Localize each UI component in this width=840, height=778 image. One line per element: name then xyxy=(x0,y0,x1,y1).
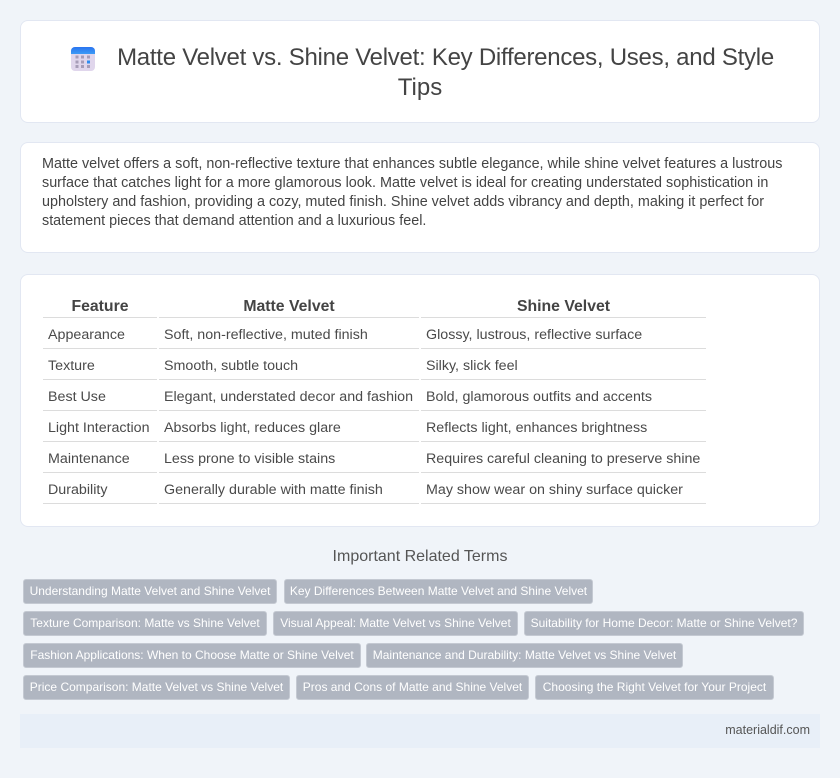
heading: Matte Velvet vs. Shine Velvet: Key Differences, Uses, and Style xyxy=(117,44,774,71)
related term tags: Fashion Applications: When to Choose Matte or Shine Velvet xyxy=(30,648,354,662)
related term tags: Visual Appeal: Matte Velvet vs Shine Velvet xyxy=(280,616,511,630)
comparison table: Requires careful cleaning to preserve shine xyxy=(426,451,700,467)
comparison table: Maintenance xyxy=(48,451,130,467)
comparison table: Less prone to visible stains xyxy=(164,451,335,467)
comparison table: Soft, non-reflective, muted finish xyxy=(164,327,368,343)
related term tags: Understanding Matte Velvet and Shine Velvet xyxy=(30,584,270,598)
related term tags: Pros and Cons of Matte and Shine Velvet xyxy=(303,680,522,694)
related term tags: Choosing the Right Velvet for Your Project xyxy=(543,680,766,694)
comparison table: Elegant, understated decor and fashion xyxy=(164,389,413,405)
comparison table: Reflects light, enhances brightness xyxy=(426,420,647,436)
text block: introduction: upholstery and fashion, providing a cozy, muted finish. Shine velvet adds vibrancy and depth, making it perfect for xyxy=(42,194,764,210)
table header: Feature xyxy=(71,298,129,315)
table header xyxy=(71,298,610,315)
heading: Tips xyxy=(398,74,442,101)
comparison table: Glossy, lustrous, reflective surface xyxy=(426,327,642,343)
comparison table: Texture xyxy=(48,358,95,374)
text block: introduction: surface that catches light for a more glamorous look. Matte velvet is ideal for creating understated sophistication in xyxy=(42,175,768,191)
text block: introduction xyxy=(42,156,782,229)
footer source text: materialdif.com xyxy=(725,723,810,737)
related term tags: Texture Comparison: Matte vs Shine Velvet xyxy=(30,616,260,630)
heading: related terms: Important Related Terms xyxy=(333,548,507,565)
comparison table: Smooth, subtle touch xyxy=(164,358,298,374)
panel: introduction xyxy=(20,142,820,253)
comparison table: Silky, slick feel xyxy=(426,358,518,374)
panel: title xyxy=(20,20,820,123)
heading xyxy=(117,44,774,101)
footer bar xyxy=(20,714,820,748)
related term tags: Maintenance and Durability: Matte Velvet vs Shine Velvet xyxy=(373,648,676,662)
table header: Shine Velvet xyxy=(517,298,610,315)
comparison table: Light Interaction xyxy=(48,420,150,436)
table header: Matte Velvet xyxy=(243,298,335,315)
comparison table: Generally durable with matte finish xyxy=(164,482,383,498)
related term tags: Key Differences Between Matte Velvet and Shine Velvet xyxy=(290,584,587,598)
comparison table: Best Use xyxy=(48,389,106,405)
related term tags: Price Comparison: Matte Velvet vs Shine Velvet xyxy=(30,680,283,694)
icon: calendar xyxy=(71,47,95,71)
text block: introduction: Matte velvet offers a soft, non-reflective texture that enhances subtle elegance, while shine velvet features a lustrous xyxy=(42,156,782,172)
comparison table: Bold, glamorous outfits and accents xyxy=(426,389,652,405)
related term tags: Suitability for Home Decor: Matte or Shine Velvet? xyxy=(531,616,797,630)
related term tags xyxy=(23,579,804,700)
comparison table: Appearance xyxy=(48,327,125,343)
comparison table xyxy=(43,298,706,504)
panel: comparison table xyxy=(20,274,820,527)
comparison table: Absorbs light, reduces glare xyxy=(164,420,341,436)
text block: introduction: statement pieces that demand attention and a luxurious feel. xyxy=(42,213,426,229)
comparison table: Durability xyxy=(48,482,107,498)
comparison table: May show wear on shiny surface quicker xyxy=(426,482,683,498)
